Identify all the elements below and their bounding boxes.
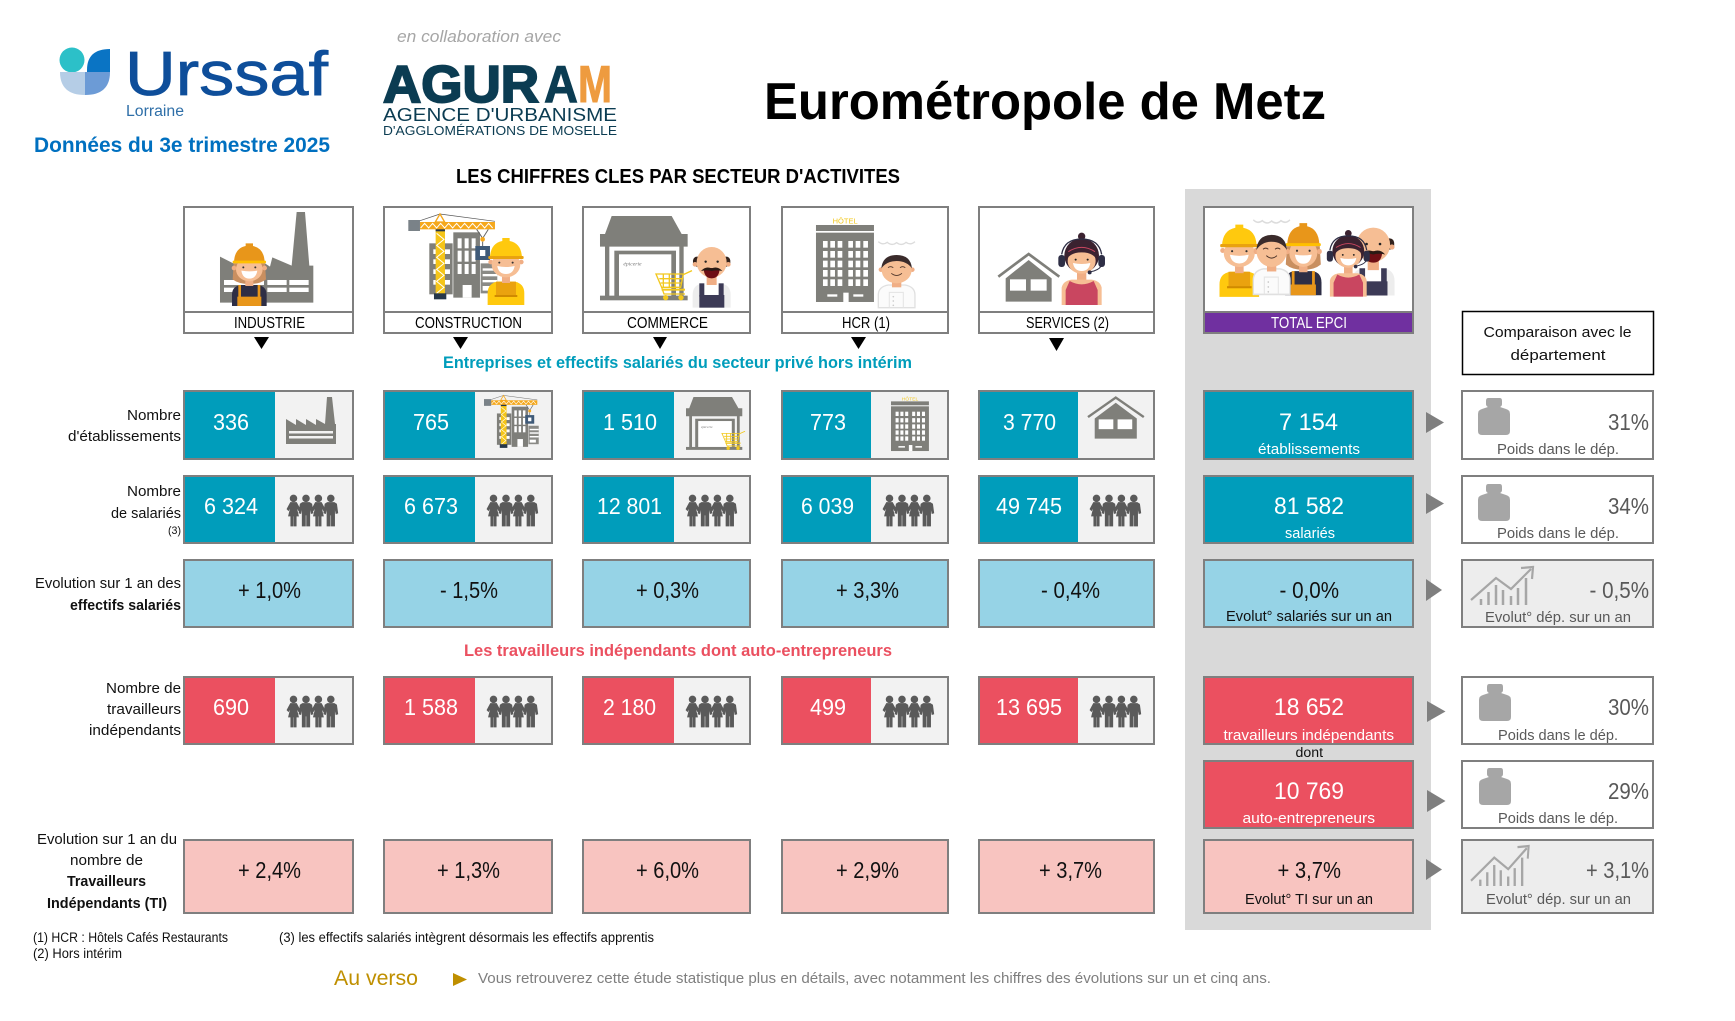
total: auto-entrepreneurs [1204,761,1413,828]
cell: construction establishments: 765 [413,409,449,435]
row label: employees: (3) [168,525,181,537]
comparison: independents change: + 3,1% [1586,857,1649,883]
total: independents: travailleurs indépendants [1224,728,1394,744]
arrow [1427,790,1446,812]
column header: construction: CONSTRUCTION [415,315,522,332]
icon: small house [1088,398,1144,439]
total: employees: salariés [1285,526,1335,542]
total: auto-entrepreneurs: auto-entrepreneurs [1242,811,1375,827]
column header: services [979,207,1154,333]
row label: independent workers: travailleurs [107,701,181,718]
comparison header: département [1510,347,1606,364]
row label: employees [111,483,181,537]
row label: independent workers [89,680,181,739]
verso note [334,967,1271,990]
comparison: auto-entrepreneurs: 29% [1608,778,1649,804]
total: employee change: Evolut° salariés sur un an [1226,609,1392,625]
cell: services independents [979,677,1154,744]
cell: HCR establishments [782,391,948,459]
collaboration note: en collaboration avec [397,27,561,46]
section heading: LES CHIFFRES CLES PAR SECTEUR D'ACTIVITES [456,166,900,188]
logo: AGURAM: D'AGGLOMÉRATIONS DE MOSELLE [383,123,617,138]
column header: HCR [782,207,948,333]
logo: AGURAM: A [544,56,578,114]
footnotes: (1) HCR : Hôtels Cafés Restaurants [33,930,228,945]
cell: industrie employees: 6 324 [204,493,258,519]
column header: HCR: HCR (1) [842,315,890,332]
cell: commerce independents change: + 6,0% [636,857,699,883]
column header: commerce [583,207,750,333]
row label: independents change: Evolution sur 1 an du [37,831,177,848]
icon: small hotel [891,395,929,451]
arrow [1427,701,1446,722]
cell: commerce independents: 2 180 [603,694,656,720]
row label: employees: de salariés [111,505,181,522]
total: establishments [1204,391,1413,459]
comparison: independents [1462,677,1653,744]
cell: construction employees [384,476,552,543]
cell: services employee change [979,560,1154,627]
column header: commerce: COMMERCE [627,315,708,332]
cell: services establishments: 3 770 [1003,409,1056,435]
column header: total EPCI: TOTAL EPCI [1271,315,1347,332]
cell: commerce independents [583,677,750,744]
total: employees [1204,476,1413,543]
logo: Urssaf Lorraine [60,40,329,120]
row label: establishments: Nombre [127,407,181,424]
connector: dont: dont [1296,745,1323,760]
comparison: independents: 30% [1608,694,1649,720]
icon: small factory [286,397,336,444]
cell: services independents change [979,840,1154,913]
verso note: Vous retrouverez cette étude statistique plus en détails, avec notamment les chiffres des évolutions sur un et cinq ans. [478,971,1271,987]
arrow [1426,579,1442,601]
row label: employees: Nombre [127,483,181,500]
arrow [1426,412,1444,433]
cell: industrie independents change: + 2,4% [238,857,301,883]
arrows: down markers [254,337,1064,351]
icon: group of workers [1220,220,1395,297]
cell: services employee change: - 0,4% [1041,577,1100,603]
cell: construction independents [384,677,552,744]
cell: industrie independents change [184,840,353,913]
cell: HCR independents [782,677,948,744]
row label: establishments: d'établissements [68,428,181,445]
icon: factory and worker [220,212,313,306]
cell: HCR employees: 6 039 [801,493,854,519]
cell: industrie establishments: 336 [213,409,249,435]
comparison: employees: 34% [1608,493,1649,519]
row label: employee change: Evolution sur 1 an des [35,575,181,592]
row label: independent workers: Nombre de [106,680,181,697]
total: independents change: + 3,7% [1278,857,1341,883]
total: independents [1204,677,1413,744]
cell: construction employees: 6 673 [404,493,458,519]
row label: establishments [68,407,181,445]
column header: industrie: INDUSTRIE [234,315,305,332]
icon: house and operator [998,233,1105,305]
cell: services employees [979,476,1154,543]
cell: construction employee change: - 1,5% [440,577,498,603]
comparison: employee change [1462,560,1653,627]
total: independents change [1204,840,1413,913]
total: establishments: 7 154 [1279,409,1338,436]
comparison header: Comparaison avec le [1484,324,1632,341]
column header: construction [384,207,552,333]
comparison: employees [1462,476,1653,543]
panel: total EPCI background [1185,189,1431,930]
comparison: employee change: - 0,5% [1590,577,1649,603]
cell: HCR employees [782,476,948,543]
comparison: independents change: Evolut° dép. sur un an [1486,892,1631,908]
cell: commerce establishments: 1 510 [603,409,657,435]
red section heading: Les travailleurs indépendants dont auto-entrepreneurs [464,642,892,660]
verso note: Au verso [334,967,418,990]
teal section heading: Entreprises et effectifs salariés du secteur privé hors intérim [443,354,912,372]
cell: HCR establishments: 773 [810,409,846,435]
cell: industrie independents [184,677,353,744]
footnotes: (2) Hors intérim [33,946,122,961]
icon: small shop [686,397,745,450]
cell: commerce employee change: + 0,3% [636,577,699,603]
cell: services independents: 13 695 [996,694,1062,720]
column header: services: SERVICES (2) [1026,315,1109,332]
row label: independents change: Travailleurs [67,873,146,890]
cell: commerce independents change [583,840,750,913]
icon: crane and worker [408,214,524,305]
cell: HCR independents change [782,840,948,913]
comparison: establishments: Poids dans le dép. [1497,442,1619,458]
icon: small crane [484,395,539,448]
cell: construction employee change [384,560,552,627]
subtitle: data period: Données du 3e trimestre 2025 [34,133,330,157]
row label: independents change: Indépendants (TI) [47,895,167,912]
cell: HCR independents: 499 [810,694,846,720]
cell: services independents change: + 3,7% [1039,857,1102,883]
cell: commerce employees [583,476,750,543]
cell: construction independents change: + 1,3% [437,857,500,883]
cell: commerce employee change [583,560,750,627]
icon: shop and grocer [600,216,731,308]
cell: commerce employees: 12 801 [597,493,662,519]
footnotes [33,930,654,961]
cell: industrie employees [184,476,353,543]
cell: industrie independents: 690 [213,694,249,720]
cell: construction establishments [384,391,552,459]
logo: AGURAM: AGENCE D'URBANISME [383,104,617,125]
comparison: establishments [1462,391,1653,459]
logo: AGURAM: M [578,56,612,114]
comparison: establishments: 31% [1608,409,1649,435]
cell: services employees: 49 745 [996,493,1062,519]
row label: independents change [37,831,177,912]
title: Eurométropole de Metz [764,73,1326,131]
cell: HCR independents change: + 2,9% [836,857,899,883]
arrow [1426,859,1442,880]
logo: AGURAM [383,56,617,138]
comparison: auto-entrepreneurs: Poids dans le dép. [1498,811,1618,827]
cell: industrie employee change: + 1,0% [238,577,301,603]
cell: HCR employee change [782,560,948,627]
comparison: independents change [1462,840,1653,913]
comparison: employees: Poids dans le dép. [1497,526,1619,542]
arrow [1426,493,1444,514]
total: employee change [1204,560,1413,627]
footnotes: (3) les effectifs salariés intègrent désormais les effectifs apprentis [279,930,654,945]
row label: independent workers: indépendants [89,722,181,739]
total: independents change: Evolut° TI sur un an [1245,892,1373,908]
row label: independents change: nombre de [70,852,143,869]
cell: commerce establishments [583,391,750,459]
comparison: independents: Poids dans le dép. [1498,728,1618,744]
cell: construction independents change [384,840,552,913]
logo: Urssaf Lorraine: Urssaf [125,40,329,109]
comparison: employee change: Evolut° dép. sur un an [1485,610,1631,626]
total: establishments: établissements [1258,442,1360,458]
cell: industrie establishments [184,391,353,459]
comparison: auto-entrepreneurs [1462,761,1653,828]
total: auto-entrepreneurs: 10 769 [1274,778,1344,805]
column header: industrie [184,207,353,333]
total: employees: 81 582 [1274,493,1344,520]
cell: services establishments [979,391,1154,459]
column header: total EPCI [1204,207,1413,333]
row label: employee change [35,575,181,614]
logo: Urssaf Lorraine: Lorraine [126,103,184,120]
icon: hotel and chef [816,216,915,308]
logo: AGURAM: AGUR [383,56,539,114]
cell: HCR employee change: + 3,3% [836,577,899,603]
total: independents: 18 652 [1274,694,1344,721]
cell: industrie employee change [184,560,353,627]
row label: employee change: effectifs salariés [70,597,181,614]
total: employee change: - 0,0% [1280,577,1339,603]
cell: construction independents: 1 588 [404,694,458,720]
comparison header [1462,312,1654,374]
